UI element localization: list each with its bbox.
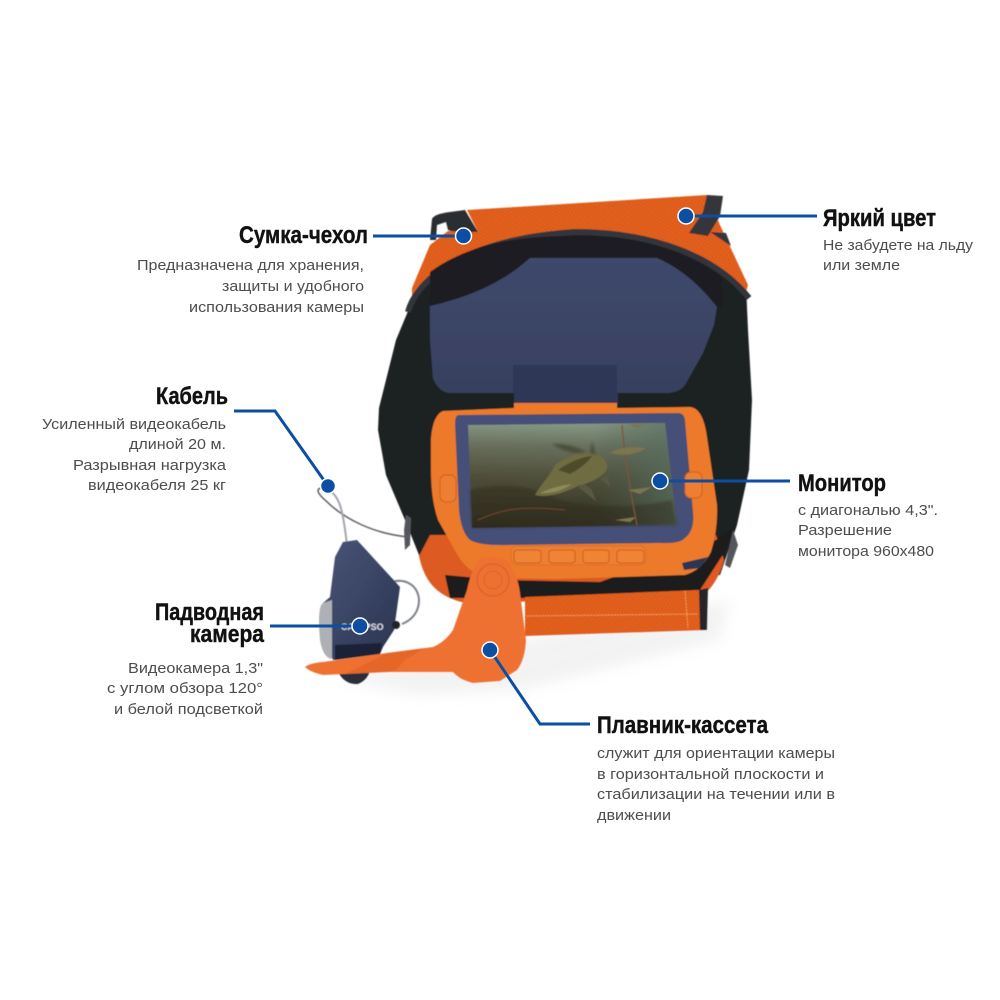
heading: Плавник-кассета (597, 712, 769, 739)
text block: bag: Предназначена для хранения, (137, 258, 364, 274)
monitor port (682, 557, 708, 570)
camera lower mount (335, 643, 382, 660)
heading: Монитор (798, 470, 886, 497)
text block: fin: в горизонтальной плоскости и (597, 767, 824, 783)
callout line (490, 650, 590, 724)
zipper (408, 232, 749, 312)
text block: cable: Разрывная нагрузка (73, 458, 227, 474)
callout line (686, 214, 817, 218)
text block: cable: длиной 20 м. (129, 437, 226, 453)
text block: fin: стабилизации на течении или в (597, 787, 835, 803)
screen (468, 423, 677, 528)
camera foot (338, 670, 370, 684)
side button right (685, 472, 702, 498)
text block: camera: камера (190, 621, 265, 648)
open lid inner navy (430, 258, 717, 393)
callout: camera (270, 618, 368, 634)
text block: camera: с углом обзора 120° (107, 681, 263, 697)
heading: Падводная (155, 599, 264, 626)
side button left (440, 475, 456, 502)
callout: cable (234, 411, 336, 494)
text block: monitor: монитора 960х480 (798, 544, 934, 560)
text block: bright colour: или земле (823, 258, 900, 274)
bag black mesh sides (378, 228, 752, 575)
black lining under zipper (430, 236, 722, 307)
product photo: camera kit in bag (305, 195, 752, 695)
strap stitching (527, 591, 697, 628)
murky bottom weeds (470, 486, 677, 528)
left strap (430, 210, 478, 240)
callout line (234, 411, 328, 486)
text block: camera: и белой подсветкой (114, 702, 263, 718)
text block: bag (137, 222, 368, 316)
callout line (660, 480, 790, 482)
text block: fin: движении (597, 808, 671, 824)
text block: fin: служит для ориентации камеры (597, 746, 835, 762)
bag side ring (404, 515, 738, 568)
bag orange strap (525, 588, 707, 636)
camera lens (319, 600, 332, 659)
heading: Сумка-чехол (239, 222, 368, 249)
pike fish (535, 453, 607, 496)
text block: bright colour (823, 205, 974, 274)
bag top flap (412, 195, 748, 296)
text block: bright colour: Не забудете на льду (823, 238, 974, 254)
camera logo text: CALYPSO (341, 622, 384, 632)
text block: camera: Видеокамера 1,3" (128, 661, 263, 677)
bag dark interior bottom (445, 525, 737, 598)
monitor navy bezel (455, 413, 693, 545)
bag lower orange shell (419, 535, 724, 603)
callout line (373, 234, 463, 238)
lid hinge (513, 365, 617, 393)
callout: monitor (652, 473, 790, 489)
fin round emblem (477, 564, 509, 596)
text block: monitor (798, 470, 938, 560)
text block: monitor: с диагональю 4,3". (798, 503, 938, 519)
strap black end (699, 588, 708, 630)
text block: bag: использования камеры (189, 300, 364, 316)
underwater camera body (322, 540, 400, 660)
heading: Яркий цвет (823, 205, 936, 232)
callout: fin (482, 642, 590, 724)
plant stems (622, 425, 637, 525)
text block: cable: Усиленный видеокабель (42, 417, 226, 433)
video cable (318, 488, 419, 624)
monitor body (431, 403, 717, 579)
callout: bright colour (678, 208, 817, 224)
callout line (270, 624, 360, 628)
orange fin cassette (305, 557, 526, 683)
text block: monitor: Разрешение (798, 523, 892, 539)
text block: cable (42, 383, 228, 494)
ground shadow (340, 600, 730, 695)
right strap (689, 195, 731, 246)
camera connector (392, 621, 400, 629)
screen image (468, 423, 677, 528)
text block: fin (597, 712, 835, 824)
monitor bottom buttons (511, 546, 646, 565)
callout: bag (373, 228, 472, 244)
heading: Кабель (156, 383, 228, 410)
text block: bag: защиты и удобного (222, 279, 364, 295)
text block: camera (107, 599, 265, 718)
text block: cable: видеокабеля 25 кг (88, 478, 226, 494)
fin fold shading (345, 648, 425, 674)
